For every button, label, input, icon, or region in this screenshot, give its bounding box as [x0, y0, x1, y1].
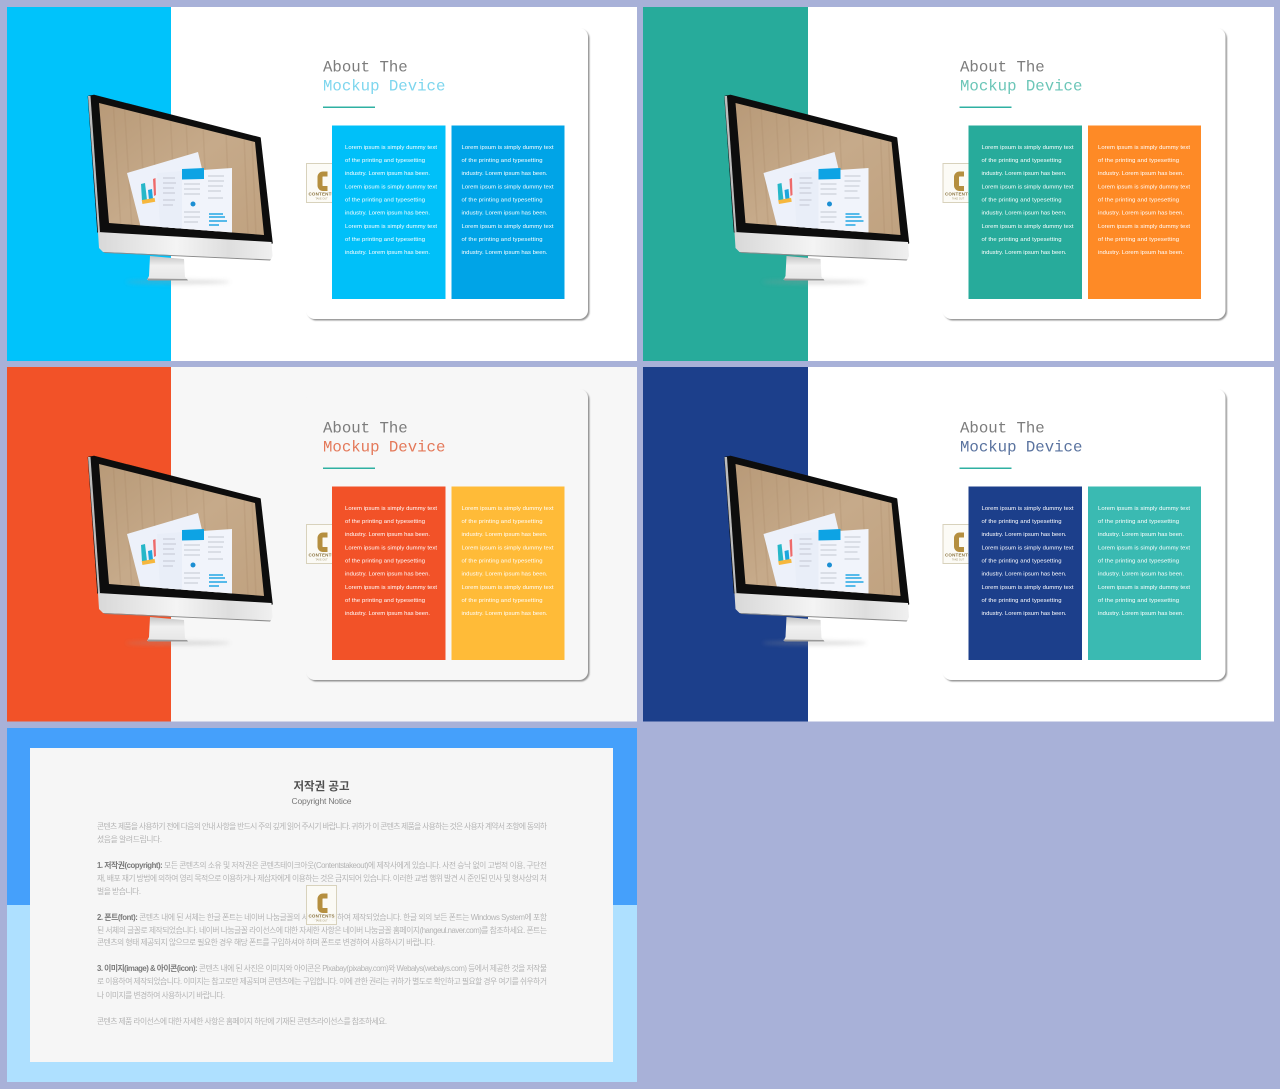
text box: left: of the printing and typesetting — [982, 598, 1062, 604]
text box: right: industry. Lorem ipsum has been. — [462, 572, 548, 578]
text box: right: of the printing and typesetting — [1098, 158, 1179, 164]
text box: left: Lorem ipsum is simply dummy text — [982, 585, 1074, 591]
panel: blue mockup slide — [7, 7, 637, 361]
text box: left: industry. Lorem ipsum has been. — [345, 210, 430, 216]
text box: left: industry. Lorem ipsum has been. — [345, 250, 430, 256]
text box: left: Lorem ipsum is simply dummy text — [345, 546, 437, 552]
panel: navy mockup slide — [643, 367, 1274, 722]
heading — [323, 58, 445, 96]
text box: right: of the printing and typesetting — [1098, 598, 1179, 604]
text box: right: Lorem ipsum is simply dummy text — [462, 184, 554, 190]
text box: right: industry. Lorem ipsum has been. — [462, 250, 548, 256]
text box: right: of the printing and typesetting — [462, 558, 542, 564]
card — [306, 28, 588, 319]
text box: left: Lorem ipsum is simply dummy text — [982, 224, 1074, 230]
text box: right: Lorem ipsum is simply dummy text — [1098, 184, 1190, 190]
notice body text: 1. 저작권(copyright): 모든 콘텐츠의 소유 및 저작권은 콘텐츠테이크아웃(Contentstakeout)에 제작사에게 있습니다. 사전 승낙 없이 고법적 이용, 구단전 — [97, 860, 547, 870]
text box: left: of the printing and typesetting — [982, 558, 1062, 564]
notice body text: 나 이미지를 변경하여 사용하시기 바랍니다. — [97, 990, 225, 1000]
panel: teal mockup slide — [643, 7, 1274, 361]
text box: left: of the printing and typesetting — [345, 519, 425, 525]
notice body text: 재, 배포 재기 방법에 의하여 영리 목적으로 이용하거나 제삼자에게 이용하는 것은 금지되어 있습니다. 이러한 교법 행위 발견 시 준인된 민사 및 형사상의 처 — [97, 873, 547, 883]
sidebar: orange — [7, 367, 171, 722]
text box: right: industry. Lorem ipsum has been. — [1098, 611, 1184, 617]
text box: right: industry. Lorem ipsum has been. — [1098, 532, 1184, 538]
logo badge — [306, 524, 336, 564]
notice title — [292, 779, 352, 806]
text box: right: Lorem ipsum is simply dummy text — [462, 506, 554, 512]
text box: left: industry. Lorem ipsum has been. — [982, 572, 1067, 578]
text box: left: Lorem ipsum is simply dummy text — [345, 184, 437, 190]
text box: left: industry. Lorem ipsum has been. — [982, 250, 1067, 256]
text box: left: industry. Lorem ipsum has been. — [345, 171, 430, 177]
text box: right — [1088, 486, 1201, 660]
text box: right: Lorem ipsum is simply dummy text — [462, 145, 554, 151]
text box: right: industry. Lorem ipsum has been. — [1098, 210, 1184, 216]
text box: left — [332, 486, 446, 660]
heading underline — [323, 106, 375, 108]
text box: right: industry. Lorem ipsum has been. — [462, 611, 548, 617]
text box: left: industry. Lorem ipsum has been. — [982, 532, 1067, 538]
text box: right: Lorem ipsum is simply dummy text — [462, 546, 554, 552]
text box: left: industry. Lorem ipsum has been. — [982, 611, 1067, 617]
text box: left: of the printing and typesetting — [982, 158, 1062, 164]
notice body text: 셨음을 알려드립니다. — [97, 834, 162, 844]
notice body text: 벌을 받습니다. — [97, 886, 141, 896]
text box: right: Lorem ipsum is simply dummy text — [1098, 506, 1190, 512]
text box: right: Lorem ipsum is simply dummy text — [1098, 546, 1190, 552]
notice title: Copyright Notice — [292, 796, 352, 806]
sidebar: blue — [7, 7, 171, 361]
text box: right: Lorem ipsum is simply dummy text — [462, 224, 554, 230]
text box: left: Lorem ipsum is simply dummy text — [345, 145, 437, 151]
text box: left: Lorem ipsum is simply dummy text — [345, 224, 437, 230]
logo badge — [943, 164, 973, 202]
text box: left: Lorem ipsum is simply dummy text — [982, 184, 1074, 190]
notice body text: 로 이용하여 제작되었습니다. 이미지는 참고로만 제공되며 콘텐츠에는 구입합니다. 이에 관한 권리는 귀하가 별도로 확인하고 필요할 경우 여기를 쉬우하거 — [97, 976, 547, 986]
text box: right: of the printing and typesetting — [1098, 558, 1179, 564]
heading: Mockup Device — [960, 438, 1082, 456]
card — [942, 389, 1226, 680]
text box: left: of the printing and typesetting — [982, 519, 1062, 525]
text box: right: industry. Lorem ipsum has been. — [462, 171, 548, 177]
text box: left: Lorem ipsum is simply dummy text — [345, 506, 437, 512]
text box: left — [968, 486, 1082, 660]
logo badge — [306, 886, 336, 924]
text box: left: Lorem ipsum is simply dummy text — [982, 546, 1074, 552]
notice body text: 2. 폰트(font): 콘텐츠 내에 된 서체는 한글 폰트는 네이버 나눔글꼴의 서체를 사용하여 제작되었습니다. 한글 외의 보든 폰트는 Windows System에 포함 — [97, 912, 547, 922]
text box: right: industry. Lorem ipsum has been. — [462, 210, 548, 216]
text box: left: Lorem ipsum is simply dummy text — [982, 506, 1074, 512]
text box: right: Lorem ipsum is simply dummy text — [1098, 145, 1190, 151]
notice body text: 콘텐츠 제품을 사용하기 전에 다음의 안내 사항을 반드시 주의 깊게 읽어 주시기 바랍니다. 귀하가 이 콘텐츠 제품을 사용하는 것은 사용자 계약서 조항에 동의하 — [97, 821, 547, 831]
card — [306, 389, 588, 680]
monitor mockup — [88, 456, 272, 645]
notice body text: 콘텐츠 제품 라이선스에 대한 자세한 사항은 홈페이지 하단에 기재된 콘텐츠라이선스를 참조하세요. — [97, 1016, 387, 1026]
text box: right: of the printing and typesetting — [1098, 198, 1179, 204]
text box: right: of the printing and typesetting — [1098, 237, 1179, 243]
text box: left: industry. Lorem ipsum has been. — [345, 611, 430, 617]
monitor mockup — [724, 456, 909, 645]
panel: orange mockup slide — [7, 367, 637, 722]
text box: right: industry. Lorem ipsum has been. — [1098, 572, 1184, 578]
text box: left: industry. Lorem ipsum has been. — [345, 572, 430, 578]
text box: right: of the printing and typesetting — [462, 237, 542, 243]
text box: right: of the printing and typesetting — [462, 158, 542, 164]
heading: About The — [323, 420, 408, 438]
notice card — [30, 748, 613, 1062]
text box: left: of the printing and typesetting — [345, 198, 425, 204]
sidebar: navy — [643, 367, 808, 722]
panel: copyright notice — [7, 728, 637, 1082]
logo badge — [306, 164, 336, 202]
notice title: 저작권 공고 — [293, 779, 350, 793]
text box: left: of the printing and typesetting — [982, 237, 1062, 243]
heading: Mockup Device — [323, 78, 445, 96]
text box: left: industry. Lorem ipsum has been. — [982, 210, 1067, 216]
sidebar: teal — [643, 7, 808, 361]
text box: left — [332, 126, 446, 299]
heading underline — [960, 106, 1012, 108]
text box: right: Lorem ipsum is simply dummy text — [462, 585, 554, 591]
text box: left: of the printing and typesetting — [345, 158, 425, 164]
text box: right — [452, 486, 564, 660]
notice body text: 3. 이미지(image) & 아이콘(icon): 콘텐츠 내에 된 사진은 이미지와 아이콘은 Pixabay(pixabay.com)와 Webalys(webalys.com) 등에서 제공한 것을 저작물 — [97, 963, 547, 973]
text box: left: of the printing and typesetting — [345, 598, 425, 604]
text box: right — [452, 126, 564, 299]
text box: right — [1088, 126, 1201, 299]
text box: left: industry. Lorem ipsum has been. — [982, 171, 1067, 177]
heading — [960, 58, 1082, 96]
text box: left: of the printing and typesetting — [345, 237, 425, 243]
monitor mockup — [724, 96, 909, 284]
heading — [960, 420, 1082, 456]
heading: About The — [960, 58, 1045, 76]
heading: About The — [960, 420, 1045, 438]
text box: right: of the printing and typesetting — [1098, 519, 1179, 525]
text box: right: of the printing and typesetting — [462, 519, 542, 525]
text box: left — [968, 126, 1082, 299]
heading: Mockup Device — [960, 78, 1082, 96]
text box: left: Lorem ipsum is simply dummy text — [345, 585, 437, 591]
text box: left: Lorem ipsum is simply dummy text — [982, 145, 1074, 151]
text box: right: industry. Lorem ipsum has been. — [1098, 171, 1184, 177]
text box: left: of the printing and typesetting — [982, 198, 1062, 204]
heading: About The — [323, 58, 408, 76]
monitor mockup — [88, 96, 272, 284]
text box: right: of the printing and typesetting — [462, 198, 542, 204]
heading underline — [960, 468, 1012, 469]
logo badge — [943, 524, 973, 564]
text box: right: Lorem ipsum is simply dummy text — [1098, 585, 1190, 591]
text box: left: of the printing and typesetting — [345, 558, 425, 564]
notice body text — [97, 821, 547, 1026]
heading: Mockup Device — [323, 438, 445, 456]
text box: right: of the printing and typesetting — [462, 598, 542, 604]
text box: right: industry. Lorem ipsum has been. — [1098, 250, 1184, 256]
heading — [323, 420, 445, 456]
notice body text: 된 서체의 글꼴로 제작되었습니다. 네이버 나눔글꼴 라이선스에 대한 자세한 사항은 네이버 나눔글꼴 홈페이지(hangeul.naver.com)를 참조하세요. 폰트는 — [97, 925, 547, 935]
card — [942, 28, 1226, 319]
notice body text: 콘텐츠의 형태 제공되지 않으므로 필요한 경우 해당 폰트를 구입하셔야 하며 폰트로 변경하여 사용하시기 바랍니다. — [97, 937, 435, 947]
text box: right: Lorem ipsum is simply dummy text — [1098, 224, 1190, 230]
heading underline — [323, 468, 375, 469]
text box: left: industry. Lorem ipsum has been. — [345, 532, 430, 538]
text box: right: industry. Lorem ipsum has been. — [462, 532, 548, 538]
